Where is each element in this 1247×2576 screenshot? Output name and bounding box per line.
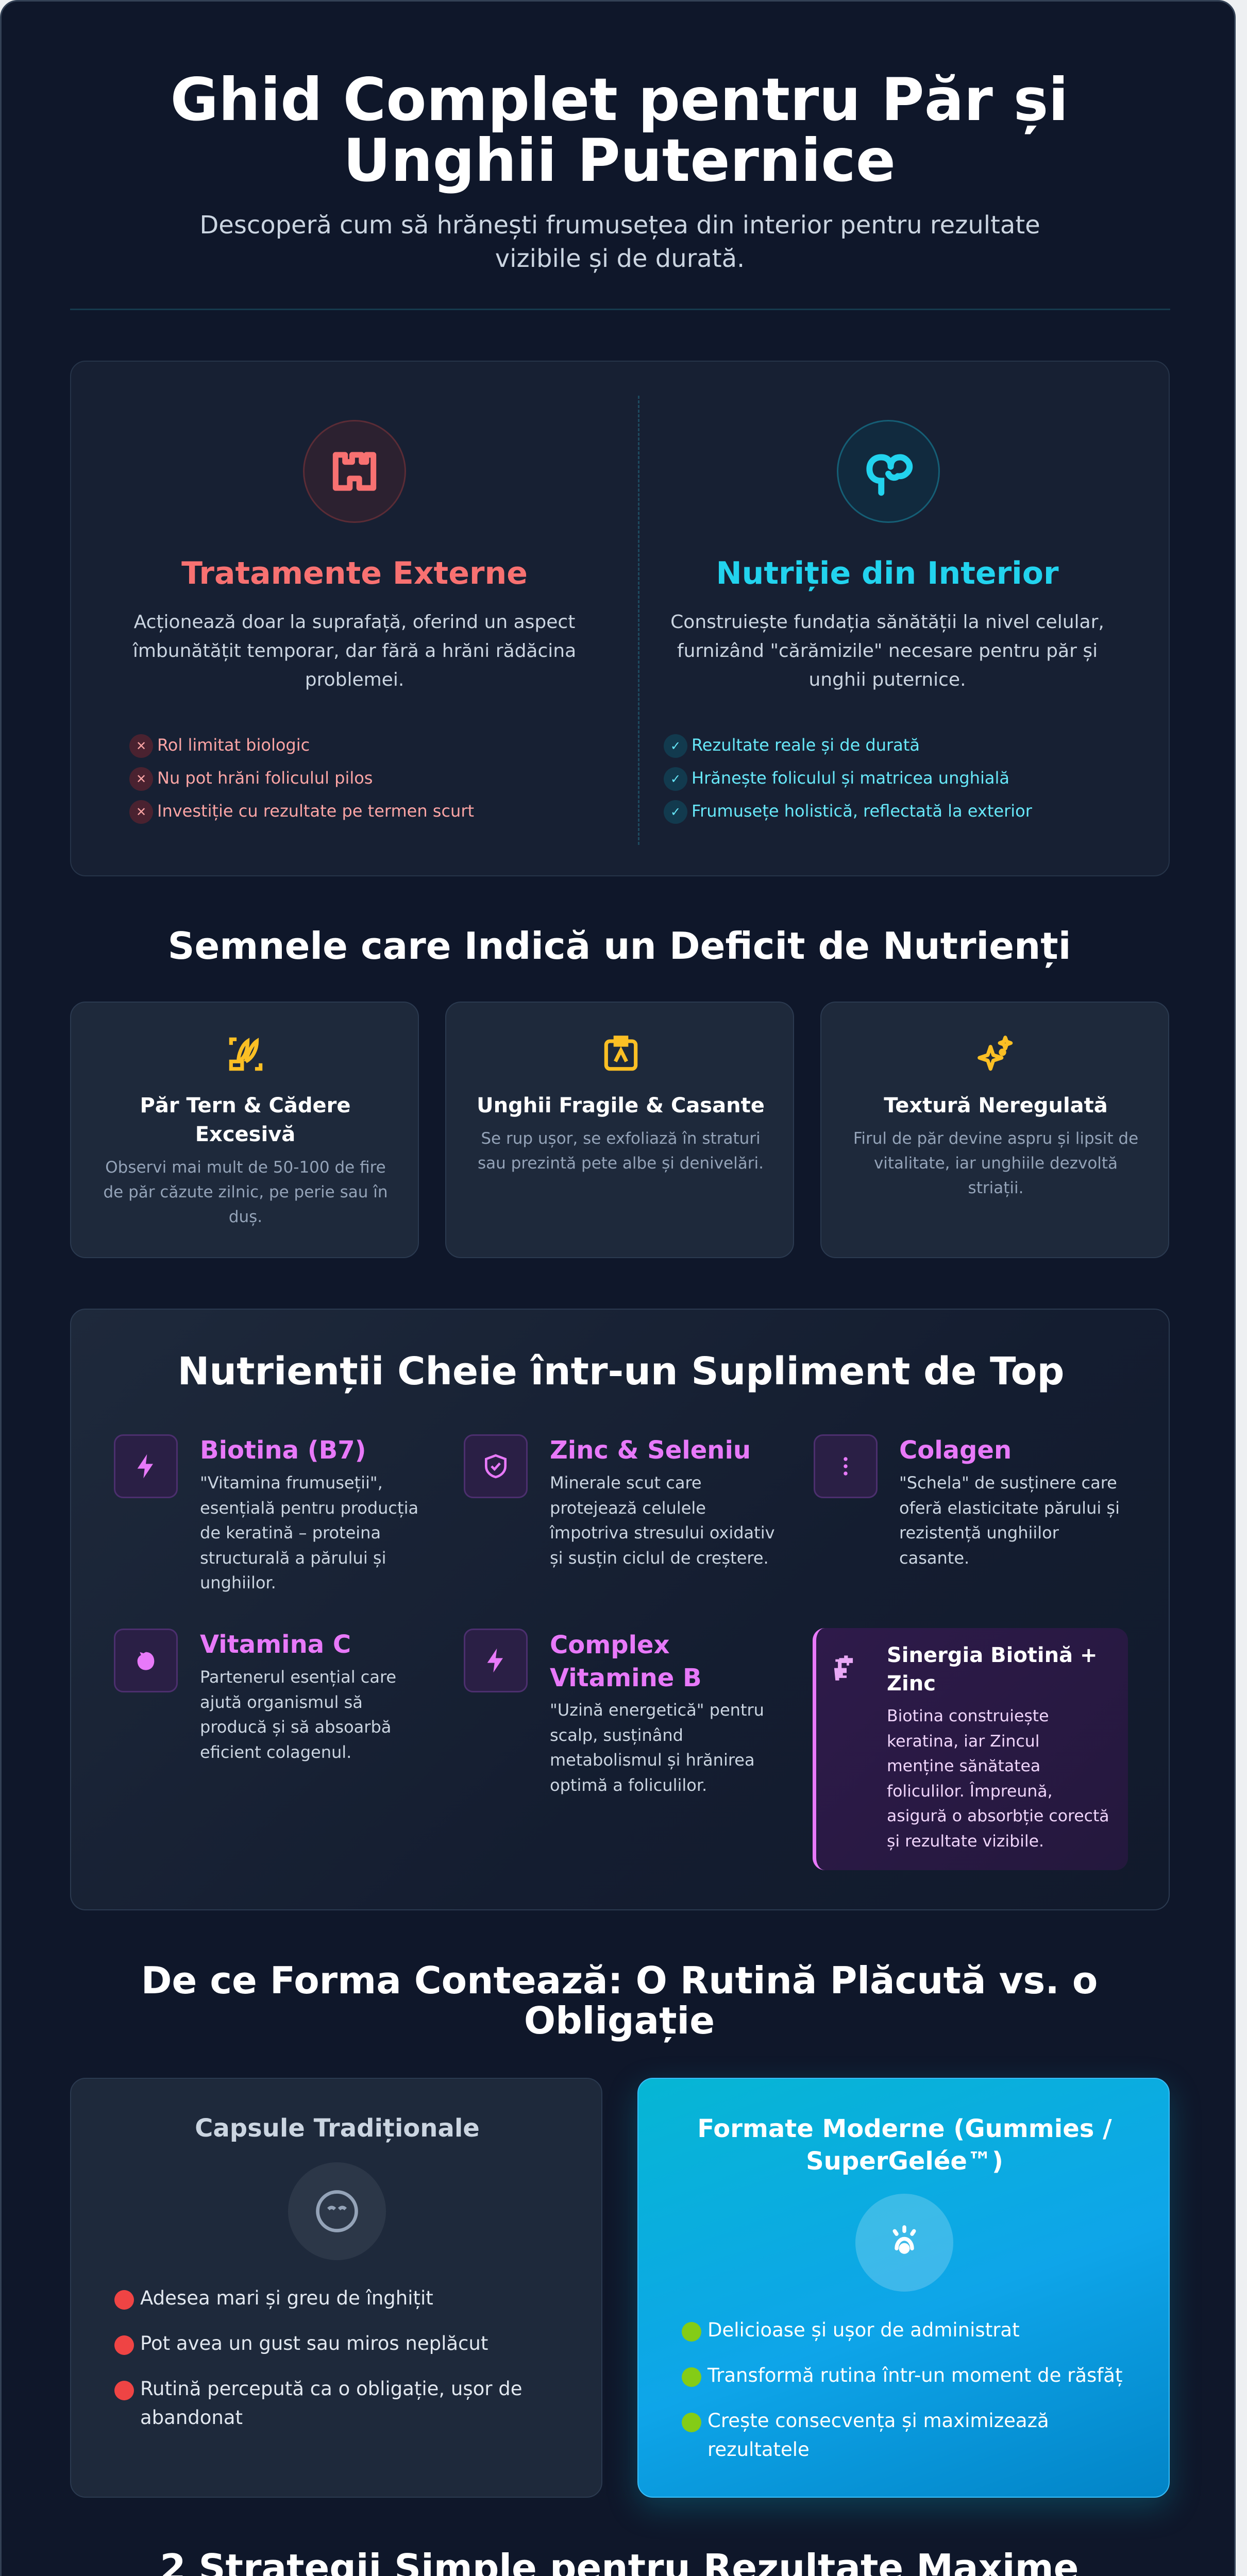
icon: puzzle [834, 1655, 853, 1681]
card: hair: Excesivă [195, 1123, 295, 1146]
text: external: Acționează doar la suprafață, oferind un aspect îmbunătățit temporar, dar fără a hrăni rădăcina problemei. [133, 612, 576, 690]
icon: happy [855, 2194, 953, 2292]
card: hair: de păr căzute zilnic, pe perie sau în [103, 1183, 387, 1201]
item: vitamina c: eficient colagenul. [200, 1742, 351, 1762]
list: capsules: Rutină percepută ca o obligație, ușor de abandonat [140, 2378, 522, 2429]
list: external [129, 734, 474, 824]
item: colagen [814, 1434, 1120, 1567]
callout: synergy [813, 1628, 1128, 1870]
callout: synergy: menține sănătatea [887, 1757, 1040, 1775]
card: hair: duș. [229, 1208, 262, 1226]
heading: nutrients: Nutrienții Cheie într-un Supliment de Top [177, 1349, 1065, 1394]
callout: synergy: foliculilor. Împreună, [887, 1782, 1053, 1800]
item: zinc: și susțin ciclul de creștere. [550, 1548, 769, 1567]
list: modern [682, 2319, 1122, 2461]
subtitle: Descoperă cum să hrănești frumusețea din interior pentru rezultate vizibile și de durată. [199, 211, 1040, 273]
list: external: ✕ [136, 739, 146, 753]
icon: external [303, 420, 406, 523]
title: Unghii Puternice [343, 126, 896, 195]
item: vitamina c: Partenerul esențial care [200, 1667, 396, 1687]
panel: comparison [70, 361, 1170, 876]
item: complex b: Vitamine B [550, 1664, 702, 1692]
item: colagen: Colagen [899, 1436, 1012, 1465]
item: vitamina c [114, 1629, 396, 1762]
item: colagen: oferă elasticitate părului și [899, 1498, 1120, 1518]
text: internal: Construiește fundația sănătății la nivel celular, furnizând "cărămizile" necesare pentru păr și unghii puternice. [670, 612, 1104, 690]
item: zinc: Zinc & Seleniu [550, 1436, 751, 1465]
item: complex b: metabolismul și hrănirea [550, 1750, 755, 1770]
item: biotina: esențială pentru producția [200, 1498, 418, 1518]
list: modern: Crește consecvența și maximizează rezultatele [707, 2410, 1049, 2461]
callout: synergy: asigură o absorbție corectă [887, 1807, 1109, 1825]
list: capsules: Adesea mari și greu de înghițit [140, 2287, 433, 2309]
card: nails: Unghii Fragile & Casante [477, 1094, 765, 1117]
item: biotina: "Vitamina frumuseții", [200, 1473, 383, 1493]
panel: nutrients [70, 1309, 1170, 1910]
callout: synergy: Sinergia Biotină + [887, 1643, 1098, 1667]
card: hair [70, 1002, 419, 1258]
title: Ghid Complet pentru Păr și [170, 65, 1069, 134]
card: texture: striații. [968, 1179, 1023, 1197]
icon: sparkles [978, 1036, 1013, 1071]
list: internal: Hrănește foliculul și matricea unghială [692, 768, 1009, 788]
card: texture [820, 1002, 1169, 1258]
item: complex b: optimă a foliculilor. [550, 1775, 707, 1795]
card: texture: Firul de păr devine aspru și lipsit de [853, 1129, 1138, 1148]
item: zinc [464, 1434, 775, 1567]
item: colagen: "Schela" de susținere care [899, 1473, 1117, 1493]
item: complex b: Complex [550, 1631, 670, 1659]
callout: synergy: Zinc [887, 1672, 936, 1696]
item: colagen: casante. [899, 1548, 969, 1567]
icon: internal [837, 420, 940, 523]
item: complex b: "Uzină energetică" pentru [550, 1700, 764, 1720]
card: capsules [70, 2078, 602, 2498]
item: vitamina c: Vitamina C [200, 1630, 351, 1659]
heading: form [141, 1959, 1098, 2042]
card: modern [637, 2078, 1170, 2498]
list: capsules: Pot avea un gust sau miros neplăcut [140, 2332, 488, 2354]
list: internal [664, 734, 1032, 824]
item: biotina: structurală a părului și [200, 1548, 386, 1567]
callout: synergy: și rezultate vizibile. [887, 1832, 1044, 1851]
item: biotina: Biotina (B7) [200, 1436, 366, 1465]
icon: nails [604, 1036, 638, 1071]
item: zinc: Minerale scut care [550, 1473, 702, 1493]
item: complex b [464, 1629, 764, 1795]
card: capsules: Capsule Tradiționale [195, 2114, 480, 2143]
item: vitamina c: producă și să absoarbă [200, 1717, 391, 1737]
list: external: ✕ [136, 772, 146, 786]
list: modern: Transformă rutina într-un moment de răsfăț [707, 2364, 1122, 2386]
icon: meh face [288, 2162, 386, 2260]
item: biotina [114, 1434, 418, 1592]
item: biotina: de keratină – proteina [200, 1523, 381, 1543]
icon: hair [229, 1038, 263, 1071]
item: biotina: unghiilor. [200, 1573, 276, 1592]
card: hair: Păr Tern & Cădere [140, 1094, 350, 1117]
list: internal: Frumusețe holistică, reflectată la exterior [692, 801, 1032, 821]
list: internal: ✓ [670, 805, 681, 819]
list: modern: Delicioase și ușor de administrat [707, 2319, 1020, 2341]
item: zinc: împotriva stresului oxidativ [550, 1523, 775, 1543]
item: complex b: scalp, susținând [550, 1725, 683, 1744]
heading: form: De ce Forma Contează: O Rutină Plăcută vs. o [141, 1959, 1098, 2002]
list: external: Nu pot hrăni foliculul pilos [157, 768, 373, 788]
card: texture: Textură Neregulată [884, 1094, 1108, 1117]
list: internal: ✓ [670, 739, 681, 753]
list: external: Investiție cu rezultate pe termen scurt [157, 801, 474, 821]
card: hair: Observi mai mult de 50-100 de fire [105, 1158, 386, 1177]
card: nails [445, 1002, 794, 1258]
list: internal: Rezultate reale și de durată [692, 735, 920, 755]
heading: form: Obligație [524, 1999, 715, 2042]
item: vitamina c: ajută organismul să [200, 1692, 363, 1711]
heading: signs: Semnele care Indică un Deficit de Nutrienți [168, 924, 1071, 968]
heading: internal: Nutriție din Interior [716, 555, 1059, 591]
title [170, 65, 1069, 195]
item: zinc: protejează celulele [550, 1498, 706, 1518]
card: nails: Se rup ușor, se exfoliază în straturi [481, 1129, 761, 1148]
item: colagen: rezistență unghiilor [899, 1523, 1059, 1543]
list: internal: ✓ [670, 772, 681, 786]
callout: synergy: keratina, iar Zincul [887, 1732, 1040, 1751]
list: external: ✕ [136, 805, 146, 819]
callout: synergy: Biotina construiește [887, 1707, 1049, 1725]
heading: external: Tratamente Externe [181, 555, 528, 591]
list: capsules [114, 2287, 522, 2429]
card: texture: vitalitate, iar unghiile dezvoltă [874, 1154, 1118, 1173]
card: modern: Formate Moderne (Gummies / SuperGelée™) [697, 2114, 1112, 2176]
card: nails: sau prezintă pete albe și denivelări. [478, 1154, 764, 1173]
list: external: Rol limitat biologic [157, 735, 310, 755]
